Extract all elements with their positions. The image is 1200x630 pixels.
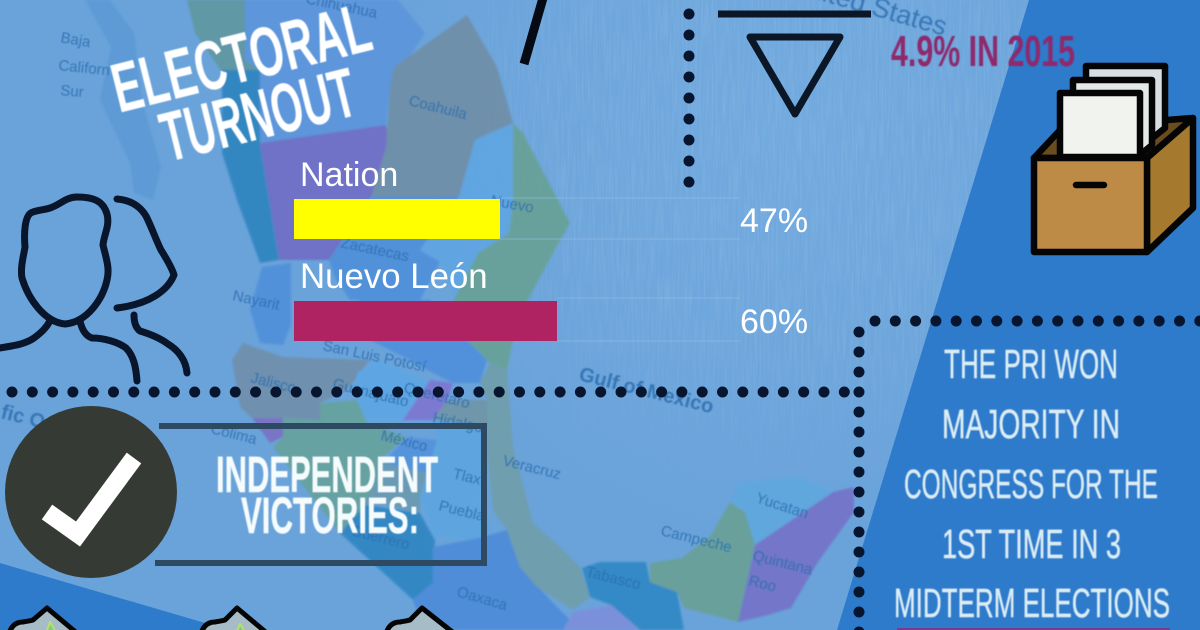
- bar label: nation: Nation: [300, 156, 398, 194]
- map labels: Oaxaca: [455, 584, 510, 614]
- icon: fraction bar: [718, 10, 871, 18]
- heading: independent victories: [216, 446, 438, 544]
- map labels: Gulf of Mexico: [577, 364, 716, 418]
- map labels: Nuevo: [489, 192, 535, 216]
- map labels: Guerrero: [349, 522, 411, 553]
- map labels: Hidalgo: [431, 409, 484, 436]
- background: [504, 0, 1024, 427]
- map labels: San Luis Potosí: [321, 337, 428, 376]
- frame: independent victories: [155, 426, 484, 563]
- map labels: México: [379, 427, 429, 455]
- map labels: Tabasco: [584, 563, 642, 593]
- heading: electoral turnout: [104, 0, 379, 177]
- map labels: Yucatan: [754, 490, 811, 523]
- map labels: Baja: [59, 29, 92, 51]
- map labels: Veracruz: [501, 452, 563, 483]
- map labels: Colima: [209, 420, 259, 448]
- icon: people outline: [0, 197, 187, 381]
- icon: ballot hand 2: [200, 608, 268, 630]
- callout text: PRI majority: [894, 341, 1170, 626]
- map labels: Jalisco: [249, 369, 298, 397]
- map labels: Californ: [58, 57, 111, 79]
- dotted frame: right callout: [859, 321, 1200, 630]
- map labels: [0, 0, 950, 614]
- bar value: 47 percent: 47%: [740, 202, 808, 240]
- map labels: Roo: [747, 572, 778, 596]
- text: 4.9 percent in 2015: 4.9% IN 2015: [891, 27, 1075, 76]
- map labels: Guanajuato: [331, 375, 410, 411]
- bar: Nuevo León 60 percent: [294, 301, 557, 341]
- map labels: Coahuila: [407, 92, 469, 123]
- map labels: Sur: [60, 82, 84, 101]
- accent bar: [897, 628, 1170, 630]
- bar: nation 47 percent: [294, 199, 500, 239]
- callout text: PRI majority: MAJORITY IN: [942, 401, 1120, 447]
- icon: check mark circle: [5, 406, 177, 578]
- icon: down triangle: [750, 37, 840, 114]
- map labels: Zacatecas: [339, 234, 410, 265]
- map labels: Querétaro: [402, 379, 472, 412]
- map labels: fic O: [0, 402, 47, 434]
- heading: electoral turnout: TURNOUT: [153, 53, 364, 177]
- dark blue panel: bottom left: [0, 563, 229, 630]
- map labels: Campeche: [659, 522, 734, 556]
- heading: independent victories: INDEPENDENT: [216, 446, 438, 503]
- icon: slash stroke: [524, 0, 543, 64]
- map labels: Tlax: [451, 465, 483, 489]
- bar value: 60 percent: 60%: [740, 303, 808, 341]
- map labels: Quintana: [751, 547, 815, 579]
- icon: ballot box with papers: [1034, 66, 1193, 252]
- bar chart: turnout: [294, 156, 808, 341]
- bar tracks: [500, 198, 740, 341]
- dotted divider: horizontal middle: [12, 386, 860, 398]
- icon: ballot hand 1: [8, 608, 78, 630]
- heading: independent victories: VICTORIES:: [241, 487, 419, 544]
- dotted divider: vertical top: [684, 14, 694, 190]
- map of Mexico: [85, 0, 854, 630]
- map labels: Nayarit: [231, 287, 282, 314]
- dark blue panel: right: [837, 0, 1200, 630]
- icon: ballot hand 3: [385, 608, 455, 630]
- bar label: Nuevo León: Nuevo León: [300, 257, 488, 296]
- map labels: Puebla: [437, 497, 487, 525]
